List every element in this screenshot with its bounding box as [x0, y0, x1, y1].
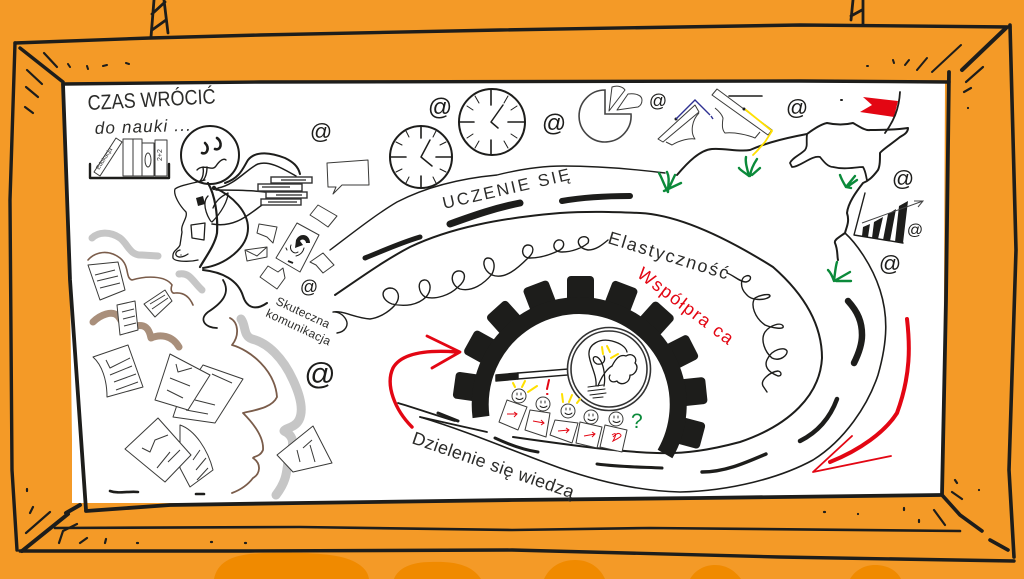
speech bubbles and phone: [245, 160, 369, 289]
heading: do nauki: do nauki ...: [94, 116, 191, 138]
mountain ridge: [677, 123, 908, 260]
icons: at signs: @: [310, 119, 332, 144]
spring: right side: [727, 273, 787, 392]
inner road start line: [398, 403, 487, 432]
magnifying glass with light bulb: [496, 328, 650, 410]
yellow tassel: [746, 110, 772, 155]
icon: growth chart: [854, 193, 923, 243]
blue tassel: [676, 100, 713, 119]
grey stroke small: [179, 274, 202, 290]
paper group middle: [93, 345, 243, 423]
ink curves below person: [203, 270, 267, 307]
icon: clock right: [459, 89, 525, 155]
label: Elastyczność: Elastyczność: [606, 228, 731, 283]
green question mark: ?: [631, 410, 643, 433]
label: Uczenie się: UCZENIE SIĘ: [441, 165, 572, 213]
person 4: [576, 410, 602, 448]
short dashes at bottom: [110, 491, 204, 494]
servers stack: [258, 177, 312, 205]
icon: light bulb: [588, 340, 637, 398]
road: learning: [330, 123, 908, 492]
gear ring arc: [480, 306, 678, 454]
bubble: [257, 224, 277, 243]
icon: graduation cap right: [712, 89, 772, 155]
red arrow: right: [813, 319, 909, 472]
hanging ropes: [151, 0, 863, 37]
label: Współpraca: Współpra ca: [634, 263, 738, 349]
flowing paths of knowledge: [88, 233, 301, 495]
icons: at signs: @: [879, 251, 901, 276]
white board surface: [64, 82, 945, 503]
icons: at signs: @: [786, 95, 808, 120]
red arrow: left: [390, 336, 460, 427]
heading: CZAS WRÓCIĆ: CZAS WRÓCIĆ: [87, 85, 216, 115]
taupe thick stroke: [93, 313, 179, 347]
icons: at signs: @: [649, 91, 667, 111]
red exclamation mark: [547, 380, 549, 394]
bubble large: [327, 160, 369, 194]
figure: thinking person: [173, 126, 312, 268]
bubble: [310, 253, 334, 273]
grey stroke upper: [92, 233, 158, 256]
cliff edge: [790, 134, 867, 180]
icons: grass tufts: [659, 157, 857, 281]
tilted book: Edukacja: [96, 147, 114, 171]
paper group top: [88, 262, 172, 335]
icon: bookshelf: 2+2: [157, 149, 164, 161]
person 1: [499, 389, 527, 430]
label: Skuteczna komunikacja: Skuteczna: [274, 294, 332, 331]
icon: envelope: [245, 247, 267, 261]
darker orange shapes along bottom edge: [214, 553, 901, 579]
inner road edge: [335, 212, 822, 453]
rope right: [851, 0, 863, 25]
scattered papers: [88, 262, 332, 494]
icons: at signs: [300, 91, 923, 391]
label: Skuteczna komunikacja: komunikacja: [264, 306, 333, 348]
icons: at signs: @: [892, 166, 914, 191]
rope left: [151, 0, 168, 37]
bubble: [310, 205, 337, 227]
icon: red flag: [841, 92, 900, 133]
icon: phone: [276, 223, 319, 272]
cables to servers: [212, 153, 300, 225]
icons: at signs: @: [428, 94, 452, 121]
icon: pie chart: [579, 86, 642, 142]
team of people: [499, 380, 643, 452]
icon: graduation cap left: [658, 100, 713, 145]
icons: at signs: @: [542, 110, 566, 137]
handle: [496, 369, 568, 381]
grey thick stroke large: [241, 319, 301, 495]
bubble: [260, 266, 285, 289]
person 2: [525, 397, 550, 437]
outer road edge with mountain: [330, 166, 665, 250]
paper group bottom: [125, 418, 332, 487]
icons: at signs: @: [304, 356, 336, 391]
faces: [516, 393, 620, 422]
brown thin line upper: [88, 252, 193, 305]
gear: [452, 276, 708, 454]
spring: communication to flexibility: [333, 237, 608, 333]
brown line large: [230, 318, 277, 493]
icons: at signs: @: [300, 277, 318, 297]
label: Dzielenie się wiedzą: Dzielenie się wiedzą: [410, 428, 578, 502]
icon: bookshelf: [90, 138, 169, 178]
right road outer edge: [420, 233, 886, 492]
person 5 with heart: [600, 412, 627, 452]
title: [87, 85, 216, 138]
icons: at signs: @: [907, 222, 923, 239]
gear teeth: [452, 276, 708, 449]
road dashes: [365, 196, 862, 472]
icon: clock left: [390, 126, 452, 188]
yellow idea rays: [513, 381, 580, 403]
person 3: [550, 404, 578, 443]
